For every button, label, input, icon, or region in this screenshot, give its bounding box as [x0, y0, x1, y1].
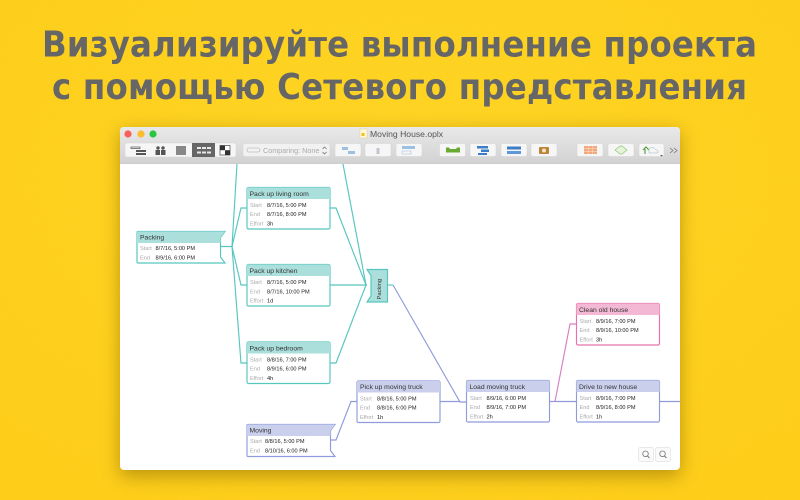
task: Load moving truck: End — [470, 405, 480, 411]
window shadow — [120, 132, 680, 476]
group: Moving: Moving — [250, 428, 272, 434]
task: Load moving truck: 2h — [486, 414, 493, 420]
task: Clean old house: Start — [580, 319, 592, 325]
task: Pack up kitchen: Pack up kitchen — [250, 268, 298, 275]
task: Load moving truck: 8/9/16, 7:00 PM — [486, 405, 526, 411]
milestone: Packing: Packing — [377, 279, 383, 300]
task: Pick up moving truck: 8/8/16, 5:00 PM — [377, 396, 417, 402]
task: Pick up moving truck: Effort — [360, 415, 374, 421]
task: Pack up bedroom: 8/8/16, 7:00 PM — [267, 358, 307, 364]
comparing dropdown — [243, 144, 330, 156]
task: Pack up bedroom: 8/9/16, 6:00 PM — [267, 367, 307, 373]
task: Pack up bedroom: Pack up bedroom — [250, 346, 303, 352]
title — [42, 24, 757, 108]
group: Packing: 8/9/16, 6:00 PM — [156, 256, 195, 262]
task: Drive to new house: 1h — [596, 414, 602, 420]
task: Pick up moving truck: 1h — [377, 415, 383, 421]
task: Drive to new house: Effort — [580, 414, 593, 420]
zoom buttons — [638, 448, 670, 462]
task: Pack up kitchen: 8/7/16, 10:00 PM — [267, 289, 310, 295]
document title: Moving House.oplx — [370, 129, 444, 139]
group: Moving: Start — [250, 439, 262, 445]
task: Clean old house — [576, 304, 660, 345]
title bar and toolbar — [120, 127, 680, 164]
connectors: teal — [220, 164, 393, 363]
task: Pack up bedroom — [247, 342, 330, 384]
connectors: blue — [330, 285, 680, 440]
task: Load moving truck: Load moving truck — [470, 384, 526, 391]
title: Визуализируйте выполнение проекта — [42, 24, 757, 66]
group: Packing — [137, 232, 225, 263]
task: Clean old house: 8/9/16, 10:00 PM — [596, 328, 639, 334]
group: Packing: Packing — [140, 234, 164, 242]
view switcher — [125, 143, 236, 157]
task: Pack up living room: 3h — [267, 222, 273, 228]
task: Pack up living room: 8/7/16, 5:00 PM — [267, 203, 307, 209]
task: Load moving truck — [466, 380, 550, 422]
task: Drive to new house: Start — [580, 396, 592, 402]
task: Clean old house: End — [580, 328, 589, 334]
task: Clean old house: 8/9/16, 7:00 PM — [596, 319, 636, 325]
task: Pack up living room — [247, 188, 330, 229]
task: Pack up kitchen: 1d — [267, 299, 273, 305]
task: Clean old house: Clean old house — [579, 307, 628, 314]
group: Packing: Start — [140, 246, 152, 252]
task: Pack up kitchen: Start — [250, 280, 262, 286]
task: Pack up bedroom: End — [250, 367, 260, 373]
toolbar buttons — [335, 144, 677, 156]
task: Drive to new house — [576, 380, 660, 422]
group: Packing: 8/7/16, 5:00 PM — [156, 246, 195, 252]
task: Pick up moving truck: Pick up moving truck — [360, 384, 423, 391]
task: Load moving truck: Effort — [470, 414, 484, 420]
task: Pick up moving truck: Start — [360, 396, 372, 402]
task: Pick up moving truck: End — [360, 406, 370, 412]
task: Pack up kitchen — [247, 264, 330, 306]
task: Pack up living room: Pack up living room — [250, 191, 309, 198]
task: Pick up moving truck — [357, 381, 440, 422]
task: Pack up kitchen: Effort — [250, 299, 264, 305]
task: Clean old house: Effort — [580, 338, 593, 344]
milestone: Packing — [367, 270, 388, 302]
task: Drive to new house: 8/9/16, 8:00 PM — [596, 405, 636, 411]
task: Pack up kitchen: End — [250, 289, 260, 295]
task: Pack up living room: Start — [250, 203, 262, 209]
window frame — [120, 127, 680, 470]
task: Pack up kitchen: 8/7/16, 5:00 PM — [267, 280, 307, 286]
task: Pick up moving truck: 8/8/16, 6:00 PM — [377, 406, 417, 412]
comparing dropdown: Comparing: None — [263, 146, 319, 155]
group: Moving: End — [250, 448, 260, 454]
connector: pink — [555, 324, 576, 402]
task: Drive to new house: Drive to new house — [579, 384, 637, 391]
group: Moving: 8/10/16, 6:00 PM — [265, 448, 308, 454]
title: с помощью Сетевого представления — [52, 67, 747, 108]
task: Drive to new house: 8/9/16, 7:00 PM — [596, 396, 636, 402]
traffic lights — [124, 130, 157, 138]
task: Clean old house: 3h — [596, 338, 602, 344]
app window — [120, 127, 680, 470]
task: Pack up bedroom: 4h — [267, 376, 273, 382]
task: Pack up bedroom: Start — [250, 358, 262, 364]
group: Packing: End — [140, 256, 150, 262]
group: Moving — [247, 424, 335, 456]
task: Load moving truck: 8/9/16, 6:00 PM — [486, 396, 526, 402]
task: Pack up bedroom: Effort — [250, 376, 264, 382]
group: Moving: 8/8/16, 5:00 PM — [265, 439, 305, 445]
task: Drive to new house: End — [580, 405, 589, 411]
task: Pack up living room: Effort — [250, 222, 264, 228]
task: Pack up living room: End — [250, 212, 260, 218]
task: Pack up living room: 8/7/16, 8:00 PM — [267, 212, 307, 218]
task: Load moving truck: Start — [470, 396, 482, 402]
